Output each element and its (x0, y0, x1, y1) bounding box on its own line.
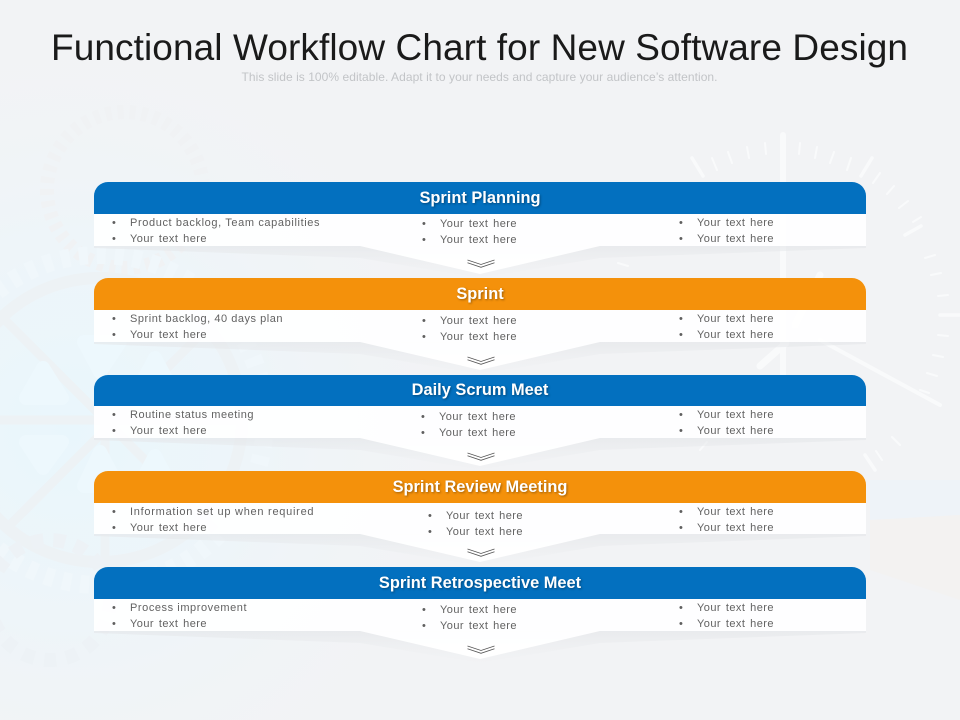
panel: Sprint Review Meeting (94, 471, 866, 566)
panel: Daily Scrum Meet: • (421, 427, 425, 439)
panel: Sprint Planning: • (112, 217, 116, 229)
panel: Sprint Planning: Your text here (440, 234, 517, 246)
panel: Daily Scrum Meet (94, 375, 866, 470)
panel: Sprint Review Meeting: • (679, 506, 683, 518)
panel: Daily Scrum Meet: • (112, 425, 116, 437)
panel: Daily Scrum Meet: • (421, 411, 425, 423)
panel: Sprint Retrospective Meet: • (112, 602, 116, 614)
panel: Sprint Retrospective Meet: • (679, 602, 683, 614)
panel: Sprint Planning (94, 182, 866, 278)
panel: Sprint (94, 278, 866, 374)
header bar (94, 471, 866, 503)
panel: Daily Scrum Meet: • (679, 425, 683, 437)
clock motif (618, 135, 960, 470)
panel: Sprint Retrospective Meet (94, 567, 866, 663)
panel: Sprint Planning: • (112, 233, 116, 245)
panel: Daily Scrum Meet: Your text here (130, 425, 207, 437)
panel: Sprint Retrospective Meet: Your text here (697, 602, 774, 614)
panel: Sprint Review Meeting: Your text here (446, 526, 523, 538)
panel: Sprint Review Meeting: • (112, 506, 116, 518)
panel: Sprint: Your text here (697, 329, 774, 341)
panel: Daily Scrum Meet: Your text here (439, 411, 516, 423)
panel: Sprint Retrospective Meet: Your text here (440, 620, 517, 632)
panel: Sprint: Your text here (440, 331, 517, 343)
panel: Sprint: • (679, 329, 683, 341)
panel: Daily Scrum Meet: • (679, 409, 683, 421)
panel: Daily Scrum Meet: • (112, 409, 116, 421)
panel: Sprint Review Meeting: • (679, 522, 683, 534)
column 1: Sprint backlog, 40 days plan (130, 313, 283, 325)
column 1: Product backlog, Team capabilities (130, 217, 320, 229)
panel: Sprint Review Meeting: Your text here (697, 522, 774, 534)
panel: Sprint Planning: • (679, 233, 683, 245)
header bar (94, 375, 866, 406)
panel: Sprint Planning: • (422, 218, 426, 230)
panel: Sprint Retrospective Meet: Your text here (130, 618, 207, 630)
column 1: Routine status meeting (130, 409, 254, 421)
panel: Sprint Review Meeting: • (428, 526, 432, 538)
panel: Sprint Retrospective Meet: • (679, 618, 683, 630)
panel: Sprint Retrospective Meet: • (422, 604, 426, 616)
panel: Sprint Review Meeting: Your text here (446, 510, 523, 522)
header bar (94, 278, 866, 310)
panel: Sprint Review Meeting: Your text here (130, 522, 207, 534)
panel: Sprint Planning: Your text here (697, 233, 774, 245)
panel: Sprint Planning: Your text here (440, 218, 517, 230)
panel: Daily Scrum Meet: Your text here (439, 427, 516, 439)
heading: Sprint Planning (419, 189, 541, 207)
heading: Daily Scrum Meet (412, 381, 549, 399)
panel: Sprint Retrospective Meet: • (422, 620, 426, 632)
column 1: Information set up when required (130, 506, 314, 518)
panel: Sprint Retrospective Meet: Your text here (440, 604, 517, 616)
gear motif (0, 112, 265, 660)
panel: Sprint: • (112, 329, 116, 341)
panel: Sprint: • (422, 315, 426, 327)
panel: Sprint Planning: Your text here (697, 217, 774, 229)
panel: Sprint Review Meeting: • (428, 510, 432, 522)
panel: Sprint Planning: Your text here (130, 233, 207, 245)
panel: Sprint: Your text here (130, 329, 207, 341)
heading: Sprint (456, 285, 504, 303)
panel: Sprint Review Meeting: • (112, 522, 116, 534)
panel: Sprint: Your text here (697, 313, 774, 325)
panel: Daily Scrum Meet: Your text here (697, 425, 774, 437)
panel: Sprint Planning: • (422, 234, 426, 246)
panel: Sprint: • (422, 331, 426, 343)
subtitle: This slide is 100% editable. Adapt it to your needs and capture your audience’s attention. (242, 70, 718, 84)
title: Functional Workflow Chart for New Software Design (51, 27, 908, 68)
header bar (94, 182, 866, 214)
panel: Sprint: • (112, 313, 116, 325)
panel: Sprint: • (679, 313, 683, 325)
panel: Sprint Planning: • (679, 217, 683, 229)
panel: Daily Scrum Meet: Your text here (697, 409, 774, 421)
panel: Sprint Review Meeting: Your text here (697, 506, 774, 518)
panel: Sprint Retrospective Meet: • (112, 618, 116, 630)
panel: Sprint: Your text here (440, 315, 517, 327)
column 1: Process improvement (130, 602, 247, 614)
panel: Sprint Retrospective Meet: Your text here (697, 618, 774, 630)
heading: Sprint Retrospective Meet (379, 574, 582, 592)
heading: Sprint Review Meeting (393, 478, 567, 496)
header bar (94, 567, 866, 599)
